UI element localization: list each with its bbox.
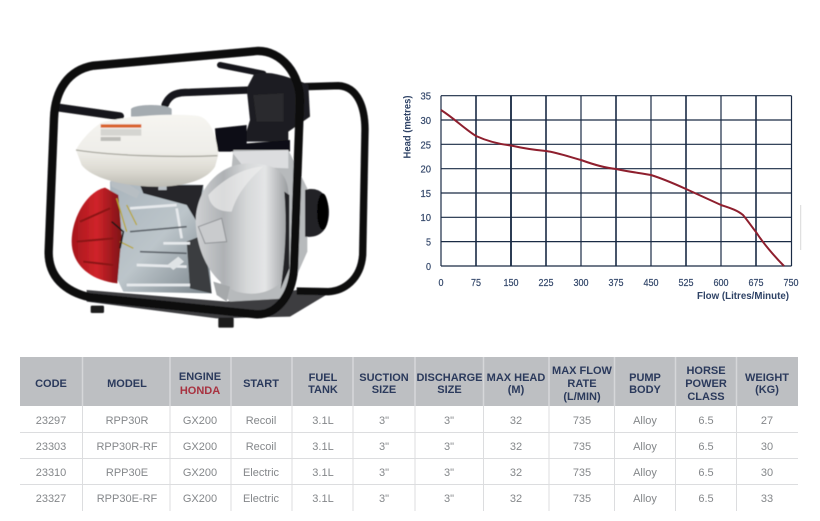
row 23297: GX200: [183, 415, 217, 427]
table header row: SIZE: [372, 384, 396, 396]
pump casing back: [220, 150, 307, 302]
x axis labels: 225: [538, 277, 554, 289]
row 23327: 33: [761, 493, 773, 505]
engine top dark block: [215, 125, 290, 152]
x axis labels: 525: [678, 277, 694, 289]
row 23310: GX200: [183, 467, 217, 479]
row 23303: 6.5: [698, 441, 714, 453]
cross tubes: [59, 65, 263, 116]
table header row: MODEL: [107, 378, 147, 390]
x axis title: Flow (Litres/Minute): [697, 290, 789, 302]
x axis labels: 675: [748, 277, 764, 289]
row 23327: 3.1L: [312, 493, 334, 505]
row 23303: Alloy: [633, 441, 657, 453]
y axis title: Head (metres): [402, 96, 414, 158]
row 23297: Alloy: [633, 415, 657, 427]
row 23327: 3": [379, 493, 389, 505]
row 23310: 30: [761, 467, 773, 479]
rubber feet: [91, 306, 234, 328]
performance curve: [441, 110, 784, 266]
row 23303: GX200: [183, 441, 217, 453]
y axis labels: 35: [420, 90, 431, 102]
row 23327: 32: [510, 493, 522, 505]
row 23297: Recoil: [246, 415, 276, 427]
table header row: HONDA: [180, 385, 220, 397]
table header row: SUCTION: [359, 372, 409, 384]
y axis labels: 5: [426, 236, 431, 248]
table header row: MAX HEAD: [487, 372, 545, 384]
fuel cap: [131, 105, 172, 117]
y axis labels: 20: [420, 164, 431, 176]
discharge outlet: [243, 73, 310, 142]
row 23310: Electric: [243, 467, 280, 479]
table header row: START: [243, 378, 279, 390]
row 23327: RPP30E-RF: [97, 493, 158, 505]
table header row: WEIGHT: [745, 372, 789, 384]
table header row: ENGINE: [179, 371, 221, 383]
x axis labels: 600: [714, 277, 729, 289]
table header row: CODE: [35, 378, 67, 390]
row 23310: 3": [379, 467, 389, 479]
x axis labels: 0: [438, 277, 444, 289]
row 23297: 3": [444, 415, 454, 427]
table header row: CLASS: [687, 391, 725, 403]
row 23297: 6.5: [698, 415, 714, 427]
table header row: (L/MIN): [563, 391, 601, 403]
row 23327: 735: [573, 493, 591, 505]
row 23310: 3": [444, 467, 454, 479]
chart grid: [441, 96, 792, 266]
row 23297: 23297: [36, 415, 66, 427]
row 23310: Alloy: [633, 467, 657, 479]
table header row: MAX FLOW: [552, 365, 613, 377]
x axis labels: 375: [608, 277, 624, 289]
pump housing: [196, 163, 288, 294]
red recoil cover: [72, 188, 122, 283]
row 23297: 3.1L: [312, 415, 334, 427]
row 23303: Recoil: [246, 441, 276, 453]
row 23327: 23327: [36, 493, 66, 505]
table header row: [35, 365, 789, 403]
row 23303: RPP30R-RF: [96, 441, 158, 453]
row 23327: Alloy: [633, 493, 657, 505]
front frame tube: [49, 51, 300, 314]
row 23310: 23310: [36, 467, 66, 479]
x axis labels: 150: [504, 277, 519, 289]
table: pump specifications: [20, 357, 798, 511]
row 23327: 3": [444, 493, 454, 505]
y axis labels: 25: [420, 140, 431, 152]
row 23327: 6.5: [698, 493, 714, 505]
x axis labels: 75: [471, 277, 481, 289]
row 23310: RPP30E: [106, 467, 148, 479]
table header row: (KG): [755, 384, 779, 396]
row 23303: 3": [379, 441, 389, 453]
row 23310: 32: [510, 467, 522, 479]
y axis labels: 30: [420, 115, 431, 127]
row 23303: 3.1L: [312, 441, 334, 453]
row 23297: 3": [379, 415, 389, 427]
row 23327: GX200: [183, 493, 217, 505]
row 23303: 735: [573, 441, 591, 453]
row 23327: Electric: [243, 493, 280, 505]
x axis labels: [438, 277, 799, 289]
icon: water pump product illustration: [49, 51, 365, 328]
table header row: TANK: [308, 384, 338, 396]
row 23303: 32: [510, 441, 522, 453]
chart: pump head vs flow curve: [402, 90, 801, 302]
table column and row lines: [20, 406, 798, 511]
table header row: (M): [508, 384, 525, 396]
y axis labels: 10: [420, 212, 431, 224]
table header row: RATE: [567, 378, 597, 390]
base plate: [87, 290, 332, 318]
row 23310: 3.1L: [312, 467, 334, 479]
row 23297: [36, 415, 773, 427]
x axis labels: 300: [574, 277, 589, 289]
y axis labels: [420, 90, 431, 273]
x axis labels: 450: [644, 277, 659, 289]
row 23310: 6.5: [698, 467, 714, 479]
y axis labels: 15: [420, 188, 431, 200]
table header row: FUEL: [309, 372, 338, 384]
suction inlet: [305, 189, 329, 237]
y axis labels: 0: [426, 261, 431, 273]
row 23327: [36, 493, 773, 505]
row 23303: 3": [444, 441, 454, 453]
x axis labels: 750: [784, 277, 799, 289]
row 23297: 32: [510, 415, 522, 427]
row 23297: RPP30R: [106, 415, 148, 427]
rear frame tube: [297, 86, 365, 292]
table header row: PUMP: [629, 372, 661, 384]
dark engine shadow under tank: [140, 185, 203, 222]
row 23303: [36, 441, 773, 453]
table header row: BODY: [629, 384, 662, 396]
table header row: DISCHARGE: [416, 372, 483, 384]
row 23297: 27: [761, 415, 773, 427]
engine block: [110, 182, 212, 293]
row 23310: 735: [573, 467, 591, 479]
table header row: SIZE: [437, 384, 462, 396]
table header row: POWER: [685, 378, 727, 390]
row 23310: [36, 467, 773, 479]
tank warning label: [101, 124, 141, 128]
row 23303: 30: [761, 441, 773, 453]
row 23303: 23303: [36, 441, 66, 453]
fuel tank: [76, 115, 218, 187]
table header row: HORSE: [686, 365, 726, 377]
row 23297: 735: [573, 415, 591, 427]
table header background: [20, 357, 798, 406]
